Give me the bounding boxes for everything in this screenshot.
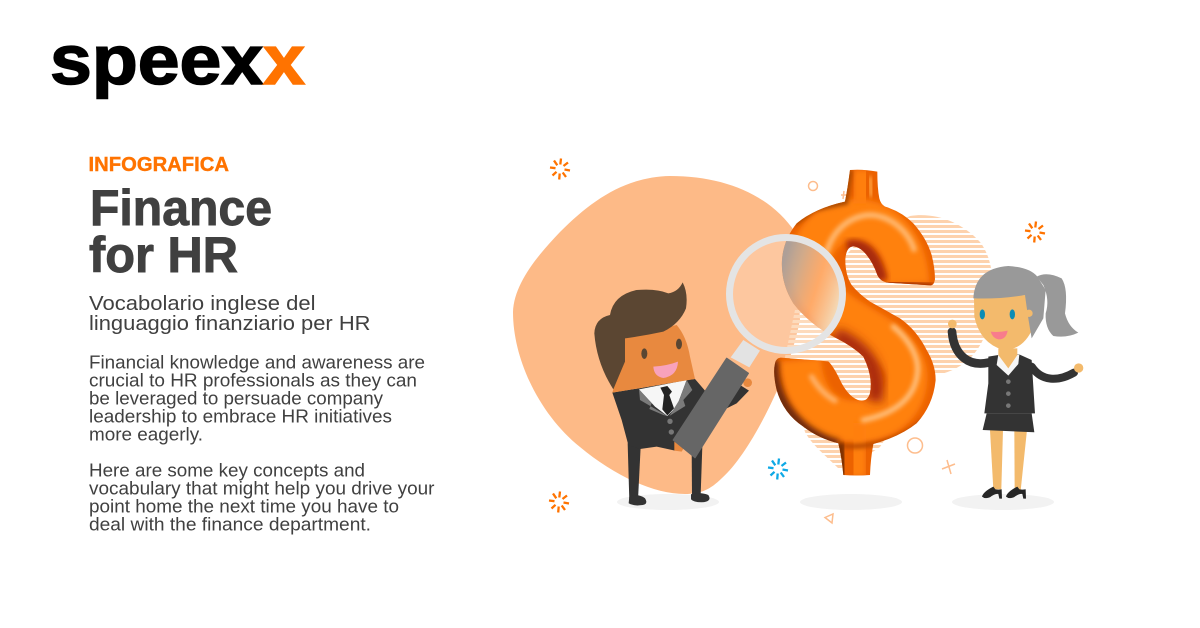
skirt — [983, 413, 1034, 432]
logo: speexx: speexx — [50, 21, 305, 99]
legs — [990, 430, 1027, 491]
dollar sign — [774, 170, 936, 476]
paragraph: financial knowledge: Financial knowledge and awareness are — [89, 352, 425, 372]
shadows — [617, 494, 1054, 510]
decorative sparks — [549, 158, 1045, 512]
title: for HR — [89, 227, 238, 283]
magnifier handle — [673, 358, 748, 458]
paragraph: key concepts: point home the next time you have to — [89, 496, 399, 516]
subtitle: Vocabolario inglese del — [89, 292, 316, 315]
paragraph: financial knowledge: leadership to embrace HR initiatives — [89, 406, 392, 426]
paragraph: financial knowledge: more eagerly. — [89, 424, 203, 444]
shoes — [982, 487, 1026, 499]
magnifier neck — [731, 340, 760, 367]
head — [612, 325, 695, 393]
paragraph: financial knowledge: be leveraged to persuade company — [89, 388, 384, 408]
eyes and mouth — [980, 309, 1015, 339]
head — [974, 295, 1033, 350]
businessman — [594, 282, 760, 505]
shirt, lapels and tie — [639, 380, 692, 416]
ponytail — [1037, 274, 1078, 337]
paragraph: key concepts: vocabulary that might help you drive your — [89, 478, 435, 498]
hair — [973, 266, 1046, 338]
blob: peach background — [513, 176, 800, 494]
arms — [952, 332, 1074, 379]
tinted area seen through the lens — [782, 241, 839, 331]
collar — [997, 354, 1019, 376]
paragraph: financial knowledge — [89, 352, 425, 444]
outer shaded edges — [773, 360, 838, 445]
hands — [948, 320, 1083, 373]
subtitle — [89, 292, 370, 335]
main body tone — [800, 220, 908, 422]
paragraph: key concepts: deal with the finance department. — [89, 514, 371, 534]
hair — [594, 282, 687, 389]
businesswoman — [948, 266, 1083, 499]
far arm and hand — [743, 378, 752, 387]
decorative outlines — [808, 182, 955, 523]
title — [89, 180, 272, 283]
eyes and mouth — [641, 339, 682, 378]
title: Finance — [90, 180, 272, 236]
hand and cuff — [674, 442, 685, 452]
blob: striped background — [785, 215, 993, 468]
jacket — [984, 354, 1035, 413]
highlights — [827, 215, 914, 252]
subtitle: linguaggio finanziario per HR — [89, 312, 370, 335]
illustration — [513, 158, 1083, 523]
magnifying glass lens — [730, 238, 842, 350]
jacket buttons — [667, 419, 674, 435]
jacket — [612, 379, 705, 451]
paragraph: key concepts: Here are some key concepts and — [89, 460, 365, 480]
text block: heading and intro — [88, 154, 435, 534]
paragraph: key concepts — [89, 460, 435, 534]
eyebrow label: INFOGRAFICA — [88, 154, 229, 176]
jacket buttons — [1006, 379, 1011, 408]
paragraph: financial knowledge: crucial to HR professionals as they can — [89, 370, 417, 390]
dark inner curves — [847, 247, 881, 281]
legs and shoes — [628, 443, 710, 505]
